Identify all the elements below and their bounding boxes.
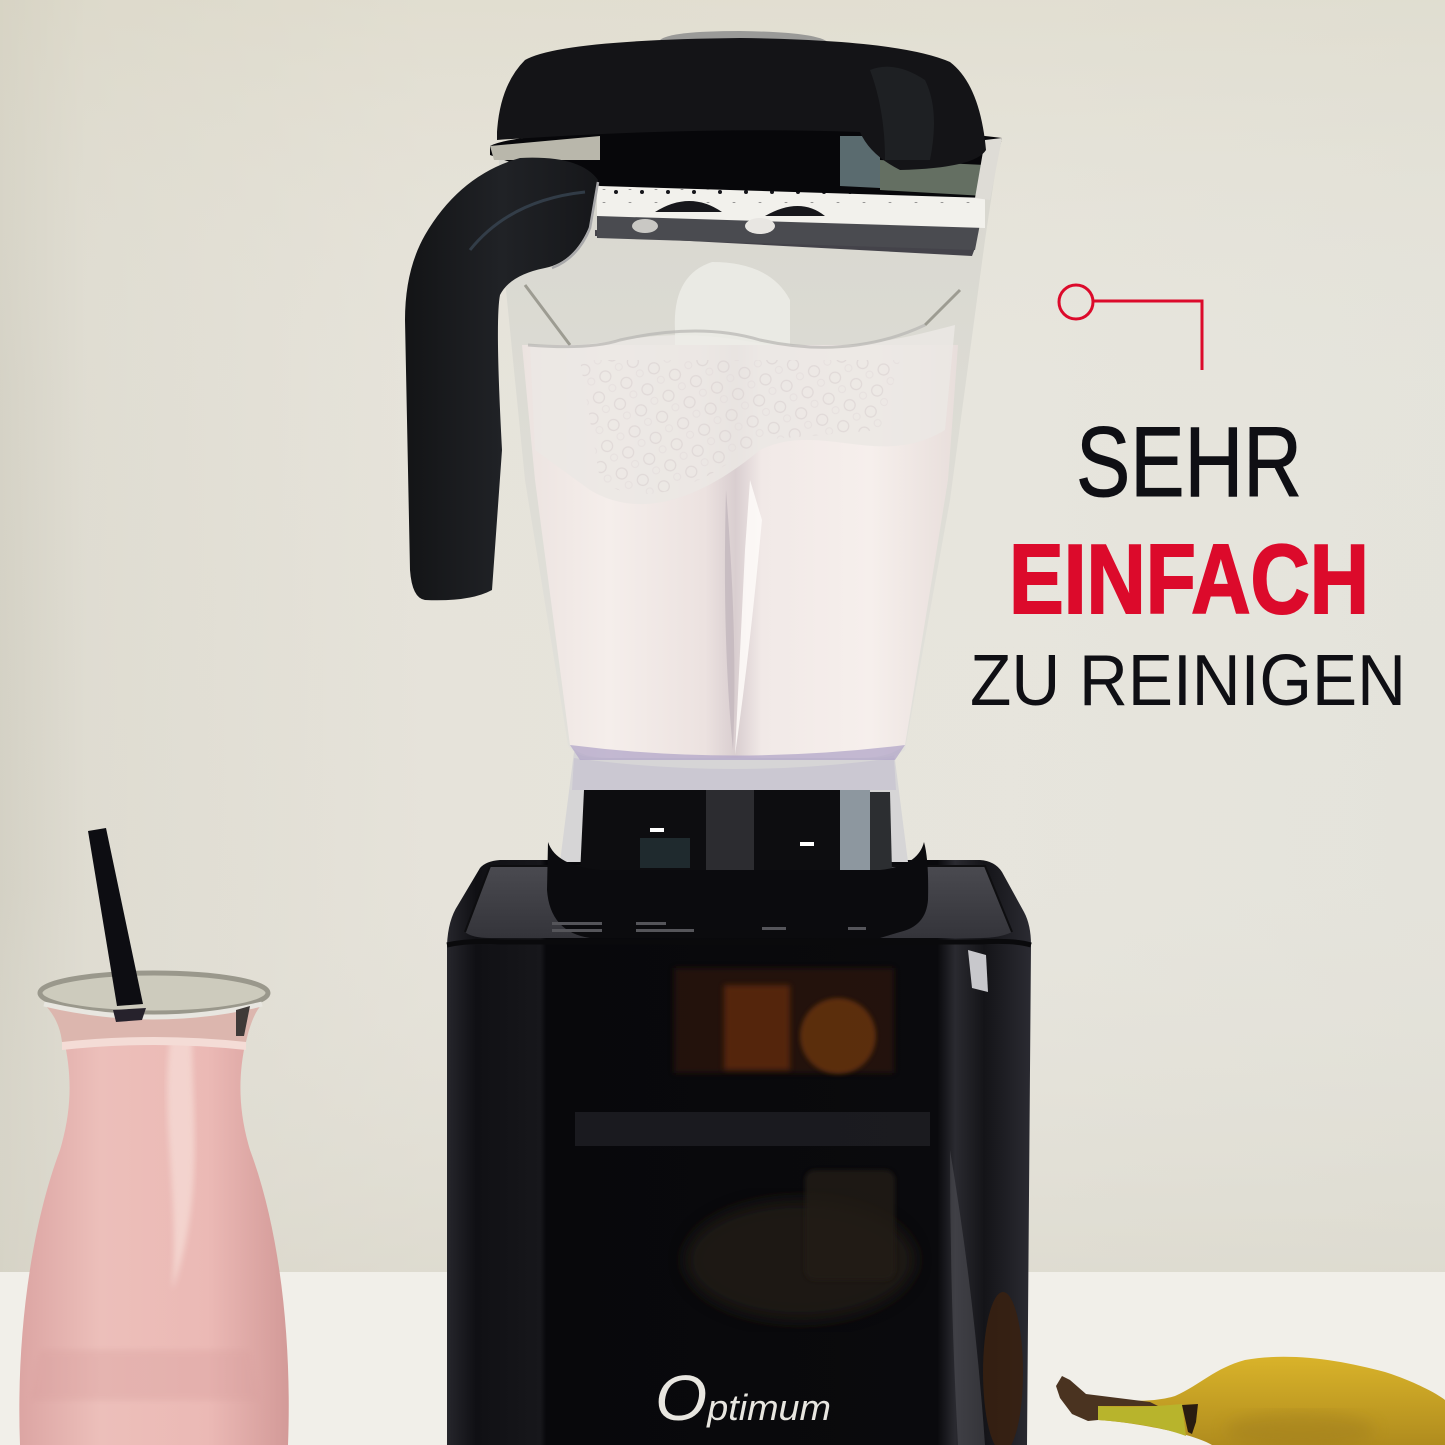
rubber jar pad	[547, 842, 928, 938]
blender lid	[497, 31, 986, 170]
blender base	[447, 860, 1031, 1445]
straw	[88, 828, 143, 1006]
banana	[1056, 1357, 1445, 1445]
blender drive socket	[547, 752, 928, 938]
callout heading: EINFACH	[1009, 524, 1369, 634]
smoothie body	[19, 1040, 289, 1445]
foam band at the top of the jar	[595, 230, 975, 256]
foam	[530, 325, 955, 504]
callout heading: SEHR	[1076, 406, 1302, 517]
callout line icon	[1059, 285, 1202, 370]
callout heading: ZU REINIGEN	[970, 641, 1406, 721]
reflections on the base	[674, 968, 894, 1073]
callout heading	[970, 406, 1406, 721]
glass neck	[44, 1004, 262, 1042]
brand name: Optimum	[655, 1362, 831, 1434]
blender handle	[405, 158, 598, 600]
inner jar rib	[675, 262, 790, 345]
blender jar with milk	[490, 128, 1002, 760]
milk crease	[725, 490, 734, 750]
milk bottle with smoothie and straw	[19, 828, 289, 1445]
table top	[0, 1272, 1445, 1445]
lid rim	[490, 128, 1002, 198]
